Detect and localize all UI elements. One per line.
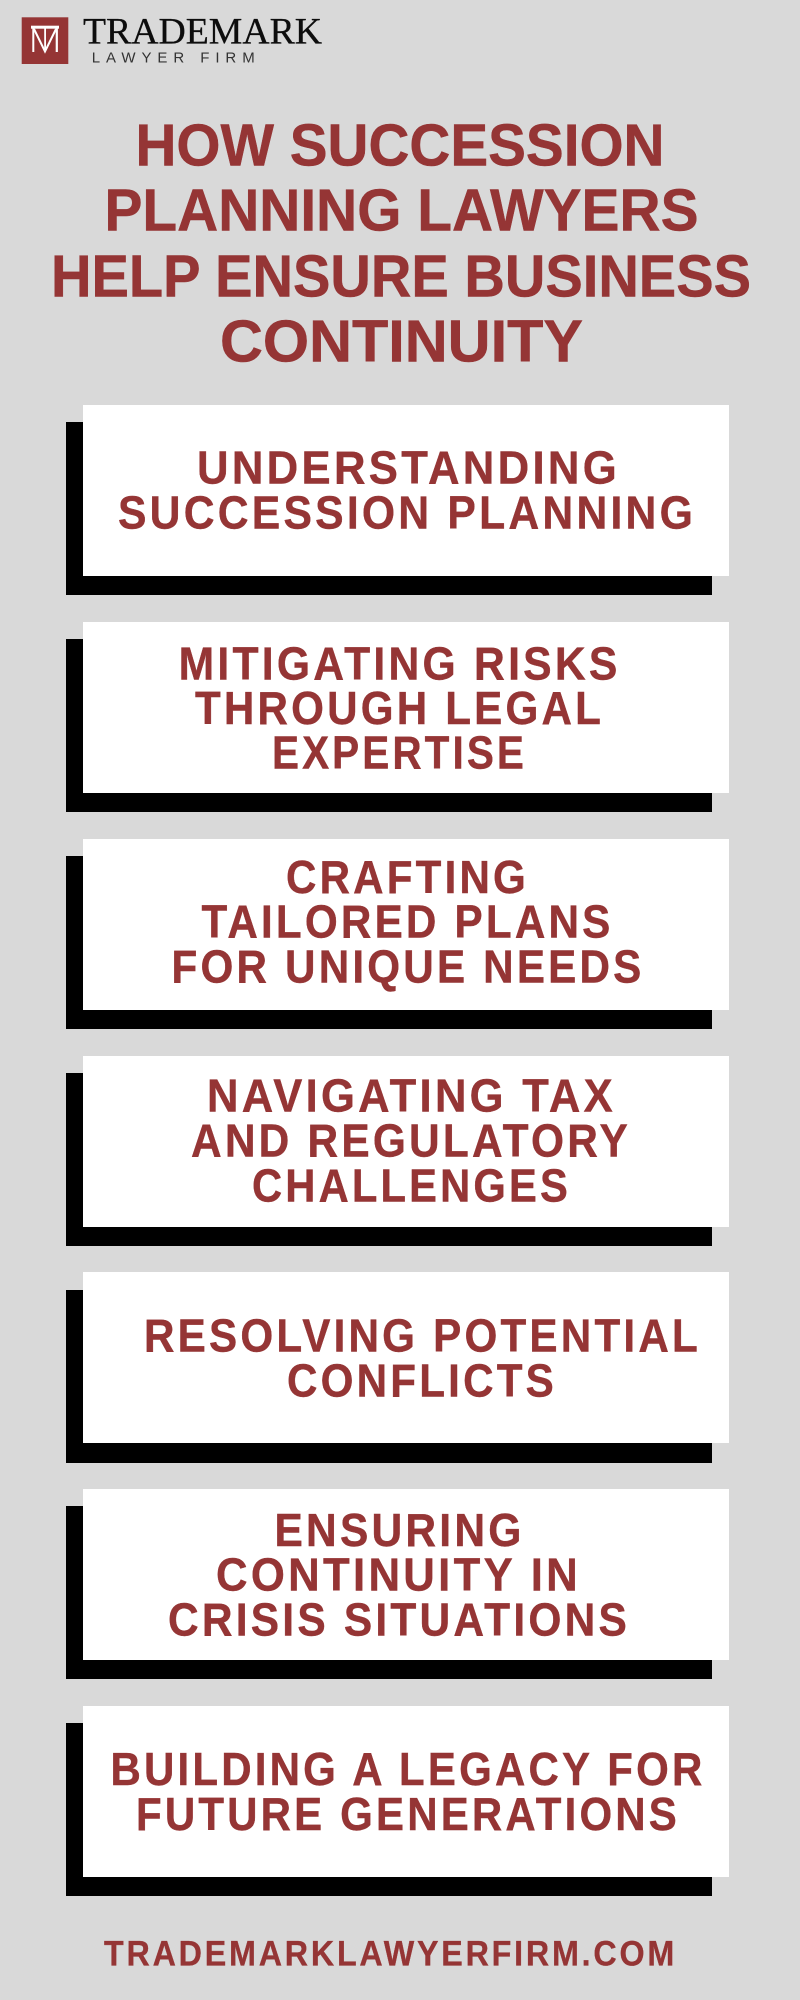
panel heading 5 [144, 1310, 701, 1407]
panel: understanding succession planning [66, 405, 729, 595]
title [51, 113, 751, 375]
panel heading 5: RESOLVING POTENTIAL [144, 1310, 701, 1362]
icon: TM monogram [22, 17, 68, 64]
panel heading 3: FOR UNIQUE NEEDS [172, 941, 644, 993]
panel heading 1 [118, 441, 696, 538]
panel heading 4: AND REGULATORY [191, 1115, 631, 1167]
panel heading 2: THROUGH LEGAL [195, 682, 604, 734]
panel heading 4 [191, 1070, 631, 1212]
logo wordmark: TRADEMARK [83, 12, 322, 53]
panel: ensuring continuity [66, 1489, 729, 1679]
panel heading 3 [172, 851, 644, 993]
panel heading 6: CONTINUITY IN [216, 1549, 581, 1601]
panel: navigating tax [66, 1056, 729, 1246]
panel heading 2: MITIGATING RISKS [179, 637, 621, 689]
footer: website: TRADEMARKLAWYERFIRM.COM [104, 1935, 677, 1974]
logo: Trademark Lawyer Firm [22, 12, 322, 67]
panel heading 2 [179, 637, 621, 779]
panel heading 3: CRAFTING [286, 851, 529, 903]
panel heading 3: TAILORED PLANS [202, 896, 614, 948]
panel heading 4: NAVIGATING TAX [207, 1070, 616, 1122]
title: PLANNING LAWYERS [104, 178, 698, 244]
panel heading 1: SUCCESSION PLANNING [118, 486, 696, 538]
panel heading 6: CRISIS SITUATIONS [168, 1594, 630, 1646]
panel heading 5: CONFLICTS [287, 1355, 557, 1407]
panel heading 7: FUTURE GENERATIONS [136, 1788, 680, 1840]
panel: resolving conflicts [66, 1272, 729, 1463]
title: HOW SUCCESSION [136, 113, 664, 179]
panel heading 2: EXPERTISE [272, 727, 527, 779]
title: HELP ENSURE BUSINESS [51, 244, 751, 310]
panel heading 6 [168, 1504, 630, 1646]
panel heading 7 [110, 1743, 706, 1840]
panel heading 7: BUILDING A LEGACY FOR [110, 1743, 706, 1795]
panel heading 6: ENSURING [274, 1504, 524, 1556]
panel: mitigating risks [66, 622, 729, 812]
logo tagline: LAWYER FIRM [92, 50, 255, 67]
title: CONTINUITY [220, 309, 583, 375]
panel: crafting tailored plans [66, 839, 729, 1029]
panel: building a legacy [66, 1706, 729, 1896]
panel heading 4: CHALLENGES [252, 1160, 571, 1212]
panel heading 1: UNDERSTANDING [197, 441, 620, 493]
